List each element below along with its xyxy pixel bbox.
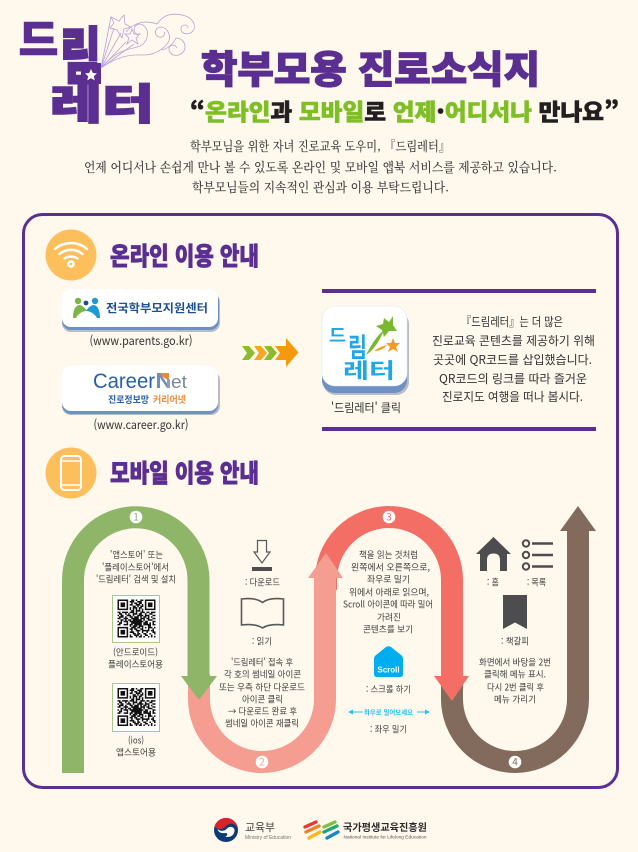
- text: step 3: 위에서 아래로 읽으며,: [349, 586, 429, 598]
- arrow: step 4 brown: [452, 506, 596, 768]
- text: step 3: 콘텐츠를 보기: [363, 622, 413, 636]
- button: parents: 전국학부모지원센터: [106, 300, 208, 316]
- text: step 4: 메뉴 가리기: [494, 692, 536, 706]
- logo: ministry of education: 교육부: [245, 819, 275, 835]
- logo: nile: 국가평생교육진흥원: [343, 819, 427, 834]
- label: android: 플레이스토어용: [108, 658, 163, 670]
- divider bottom: [322, 427, 596, 431]
- text: qr description: 진로교육 콘텐츠를 제공하기 위해: [432, 332, 595, 349]
- qr: android: [112, 596, 160, 642]
- icon: book: [242, 599, 284, 628]
- intro text: 학부모님을 위한 자녀 진로교육 도우미, 『드림레터』: [190, 136, 450, 155]
- text: step 2: '드림레터' 접속 후: [231, 656, 293, 668]
- text: step 3: [343, 548, 433, 636]
- text: step 2: 썸네일 아이콘 재클릭: [225, 716, 299, 730]
- arrow: step 2 pink: [199, 553, 343, 768]
- text: step 4: 다시 2번 클릭 후: [487, 680, 544, 694]
- label: android: (안드로이드): [113, 646, 158, 658]
- divider top: [322, 289, 596, 293]
- text: step 2: → 다운로드 완료 후: [228, 704, 297, 718]
- text: step 3: 책을 읽는 것처럼: [359, 548, 418, 561]
- icon: app: 드: [329, 322, 346, 348]
- qr: ios: [112, 684, 160, 732]
- button: careernet: 커리어넷: [153, 392, 186, 406]
- intro text: 언제 어디서나 손쉽게 만나 볼 수 있도록 온라인 및 모바일 앱북 서비스를 제공하고 있습니다.: [84, 157, 557, 176]
- logo: nile: [305, 819, 427, 840]
- title: 학부모용 진로소식지: [201, 39, 540, 94]
- intro text: [84, 136, 557, 196]
- text: step 1: '앱스토어' 또는: [110, 548, 163, 561]
- button: careernet: 진로정보망: [108, 392, 149, 406]
- button: parents: [62, 289, 220, 332]
- icon: download: [252, 540, 272, 571]
- text: step 3: 좌우로 밀기: [367, 572, 410, 586]
- label: ios: 앱스토어용: [116, 746, 156, 758]
- text: step 4: [479, 656, 551, 706]
- text: qr description: 『드림레터』는 더 많은: [461, 313, 563, 330]
- label: list: : 목록: [527, 576, 546, 588]
- icon: scroll: Scroll: [377, 666, 400, 674]
- heading: mobile: 모바일 이용 안내: [110, 454, 259, 490]
- logo: nile: National Institute for Lifelong Education: [344, 834, 427, 840]
- text: qr description: QR코드의 링크를 따라 즐거운: [439, 370, 587, 387]
- text: step 4: 화면에서 바탕을 2번: [479, 656, 551, 668]
- icon: app: 림: [348, 326, 367, 365]
- intro text: 학부모님들의 지속적인 관심과 이용 부탁드립니다.: [192, 177, 449, 196]
- icon: swipe arrows: 좌우로 밀어보세요: [364, 706, 413, 716]
- logo: 드림레터: 레터: [50, 71, 154, 132]
- icon: app: [322, 306, 409, 395]
- logo: ministry of education: Ministry of Education: [245, 835, 291, 841]
- label: ios: (ios): [128, 734, 144, 746]
- text: qr description: [432, 313, 595, 405]
- text: qr description: 진로지도 여행을 떠나 봅시다.: [442, 388, 583, 405]
- label: download: : 다운로드: [245, 576, 280, 588]
- icon: app: 레터: [343, 355, 395, 385]
- icon: bookmark: [503, 595, 527, 629]
- label: read: : 읽기: [252, 634, 272, 648]
- logo: 드림레터: 드: [19, 7, 58, 68]
- text: step 3: 가려진: [377, 610, 401, 624]
- button: careernet: et: [171, 372, 187, 392]
- label: home: : 홈: [487, 576, 499, 588]
- main panel: [24, 214, 618, 788]
- arrow: step 3 red: 3: [386, 508, 392, 524]
- text: qr description: 곳곳에 QR코드를 삽입했습니다.: [433, 351, 592, 368]
- label: bookmark: : 책갈피: [501, 634, 529, 648]
- text: step 2: 또는 우측 하단 다운로드: [219, 680, 305, 694]
- text: step 2: 각 호의 썸네일 아이콘: [224, 668, 301, 680]
- logo: 드림레터: 림: [60, 8, 101, 96]
- heading: online: 온라인 이용 안내: [110, 237, 259, 273]
- text: step 1: '플레이스토어'에서: [102, 560, 169, 574]
- arrow: step 2 pink: 2: [259, 754, 265, 768]
- icon: list: [523, 540, 553, 570]
- logo: 드림레터: [19, 7, 195, 132]
- icon: wifi: [46, 230, 96, 280]
- text: step 1: [96, 548, 176, 586]
- caption: app: '드림레터' 클릭: [331, 399, 401, 416]
- text: step 1: '드림레터' 검색 및 설치: [96, 572, 176, 586]
- arrow: step 1 green: [73, 508, 217, 773]
- label: swipe: : 좌우 밀기: [370, 722, 407, 736]
- arrow: step 3 red: [326, 508, 469, 701]
- text: step 4: 클릭해 메뉴 표시.: [484, 668, 546, 680]
- icon: home: [476, 537, 511, 571]
- arrow: step 1 green: 1: [133, 508, 139, 524]
- text: step 3: 왼쪽에서 오른쪽으로,: [351, 560, 430, 574]
- text: step 2: [219, 656, 305, 730]
- arrow: [242, 338, 298, 367]
- subtitle: “온라인과 모바일로 언제·어디서나 만나요”: [190, 93, 619, 127]
- text: step 2: 아이콘 클릭: [242, 692, 283, 706]
- logo: ministry of education: [214, 818, 291, 842]
- icon: mobile: [46, 448, 96, 498]
- label: scroll: : 스크롤 하기: [366, 682, 411, 696]
- icon: scroll: [374, 646, 403, 677]
- icon: swipe arrows: [348, 706, 430, 716]
- label: ios: [116, 734, 156, 758]
- url: parents: (www.parents.go.kr): [90, 332, 192, 349]
- arrow: step 4 brown: 4: [512, 754, 518, 768]
- label: android: [108, 646, 163, 670]
- button: careernet: [62, 366, 220, 415]
- url: career: (www.career.go.kr): [94, 416, 188, 433]
- text: step 3: Scroll 아이콘에 따라 밀어: [343, 598, 433, 610]
- button: careernet: Career: [93, 370, 155, 393]
